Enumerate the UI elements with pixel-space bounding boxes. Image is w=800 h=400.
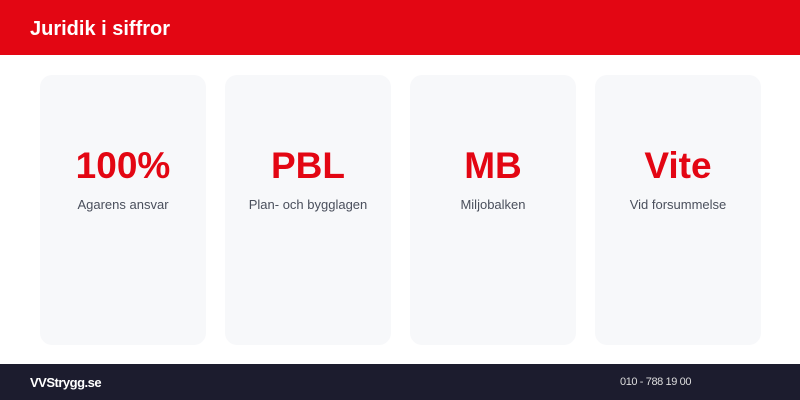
footer	[0, 364, 800, 400]
card: MB: Miljobalken	[460, 197, 526, 212]
header	[0, 0, 800, 55]
title: Juridik i siffror	[30, 18, 170, 40]
card: PBL	[225, 75, 391, 345]
card: Vite	[595, 75, 761, 345]
card: 100%: Agarens ansvar	[77, 197, 169, 212]
card: PBL: PBL	[271, 145, 345, 186]
card: Vite: Vid forsummelse	[630, 197, 726, 212]
footer phone: 010 - 788 19 00	[620, 376, 691, 388]
card: Vite: Vite	[644, 145, 712, 186]
card: 100%: 100%	[76, 145, 170, 186]
card: MB	[410, 75, 576, 345]
footer brand: VVStrygg.se	[30, 375, 101, 390]
card: MB: MB	[464, 145, 522, 186]
card: 100%	[40, 75, 206, 345]
card: PBL: Plan- och bygglagen	[249, 197, 367, 212]
